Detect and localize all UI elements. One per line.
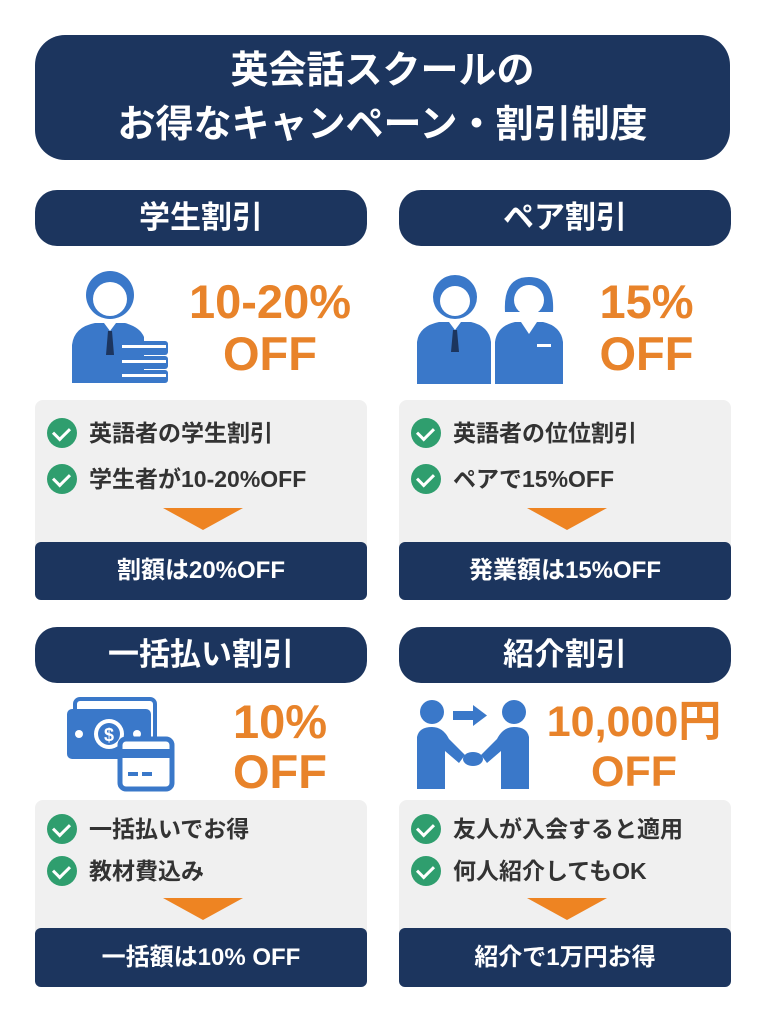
heading: pair [399, 190, 731, 246]
icon: handshake with arrow [417, 700, 529, 789]
heading: lump sum [35, 627, 367, 683]
heading: referral: 紹介割引 [503, 637, 627, 672]
list box: 一括払いでお得 [89, 816, 249, 842]
list box: ペアで15%OFF [453, 466, 614, 492]
list box: 友人が入会すると適用 [453, 816, 683, 842]
panel: student discount [35, 190, 367, 600]
discount value: OFF [223, 327, 317, 380]
discount value [189, 275, 351, 380]
panel: referral discount [399, 627, 731, 987]
list box [35, 400, 367, 600]
icon: cash and card [67, 697, 174, 792]
heading: referral [399, 627, 731, 683]
discount value: 10% [233, 695, 327, 748]
list box [399, 800, 731, 987]
heading: lump sum: 一括払い割引 [108, 637, 294, 672]
panel: lump-sum discount [35, 627, 367, 987]
title: 英会話スクールの [230, 50, 534, 92]
list box [35, 800, 367, 987]
discount value: 10-20% [189, 275, 351, 328]
discount value [599, 275, 694, 380]
title: お得なキャンペーン・割引制度 [117, 104, 648, 146]
list box [399, 400, 731, 600]
discount value: 10,000円 [547, 698, 721, 746]
discount value: 15% [599, 275, 694, 328]
list box: 英語者の学生割引 [89, 420, 273, 446]
discount value [233, 695, 327, 798]
heading: student [35, 190, 367, 246]
panel: pair discount [399, 190, 731, 600]
title [35, 35, 730, 160]
heading: student: 学生割引 [139, 200, 263, 235]
list box: 一括額は10% OFF [102, 944, 300, 971]
icon: cash and card: $ [104, 725, 114, 745]
list box: 何人紹介してもOK [453, 858, 647, 884]
icon: student with books [72, 271, 168, 383]
discount value: OFF [233, 745, 327, 798]
list box: 割額は20%OFF [117, 557, 285, 584]
list box: 教材費込み [89, 858, 204, 884]
list box: 紹介で1万円お得 [474, 944, 656, 971]
list box: 英語者の位位割引 [453, 420, 637, 446]
list box: 学生者が10-20%OFF [89, 466, 306, 492]
list box: 発業額は15%OFF [469, 557, 661, 584]
heading: pair: ペア割引 [503, 200, 627, 235]
icon: two people [417, 275, 563, 384]
discount value: OFF [600, 327, 693, 380]
discount value [547, 698, 721, 796]
discount value: OFF [591, 748, 677, 796]
